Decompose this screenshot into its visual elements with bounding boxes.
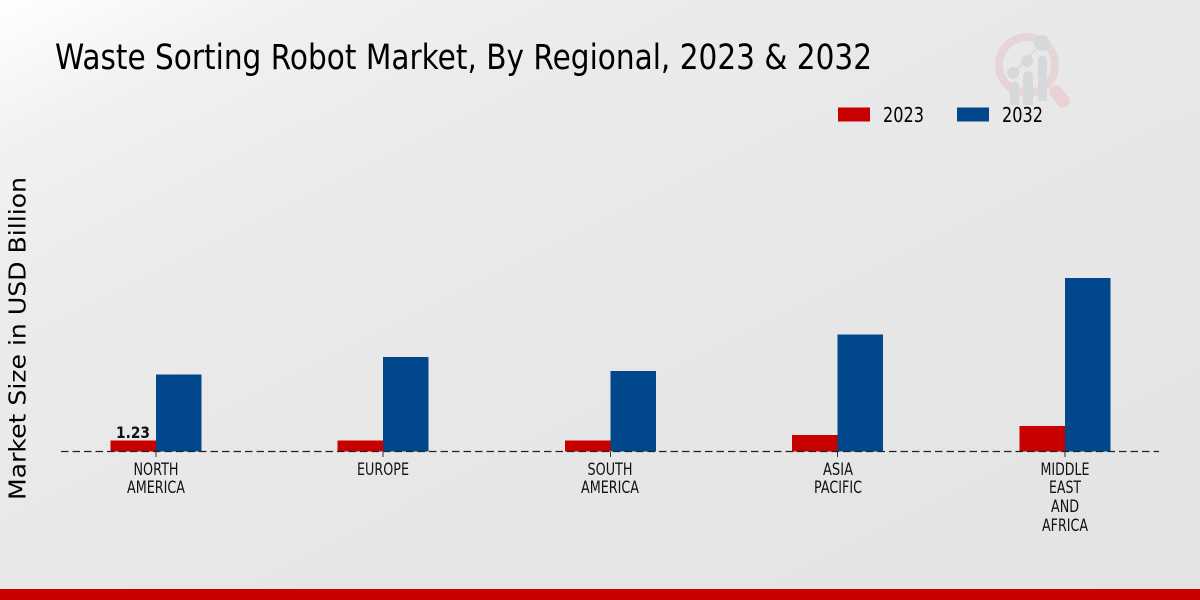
group: Europe [338, 357, 428, 452]
bar chart [61, 278, 1159, 457]
label: Middle East and Africa: AFRICA [1042, 516, 1089, 535]
legend: 2032 [957, 103, 1043, 127]
baseline [61, 450, 1159, 452]
icon: watermark logo [999, 35, 1063, 105]
title: Waste Sorting Robot Market, By Regional, 2023 & 2032 [55, 38, 872, 78]
group: Asia Pacific [792, 334, 883, 452]
label: Asia Pacific: PACIFIC [814, 478, 862, 497]
footer bar [0, 589, 1200, 600]
legend: 2023 [838, 103, 924, 127]
group: North America [110, 374, 202, 452]
label: Middle East and Africa: MIDDLE [1040, 460, 1090, 479]
group: Middle East and Africa [1020, 278, 1110, 452]
label: Asia Pacific: ASIA [823, 460, 854, 479]
legend: 2032: 2032 [1002, 103, 1043, 127]
label: Europe: EUROPE [357, 460, 409, 479]
label: South America: AMERICA [581, 478, 640, 497]
label: Middle East and Africa: AND [1051, 497, 1079, 516]
legend [838, 103, 1043, 127]
data label: 1.23: 1.23 [116, 423, 150, 442]
label: North America: AMERICA [127, 478, 186, 497]
category labels [127, 460, 1090, 535]
y-axis label: Market Size in USD Billion [6, 177, 32, 500]
group: South America [565, 371, 656, 452]
label: South America: SOUTH [588, 460, 632, 479]
legend: 2023: 2023 [883, 103, 924, 127]
label: North America: NORTH [134, 460, 178, 479]
label: Middle East and Africa: EAST [1049, 478, 1082, 497]
